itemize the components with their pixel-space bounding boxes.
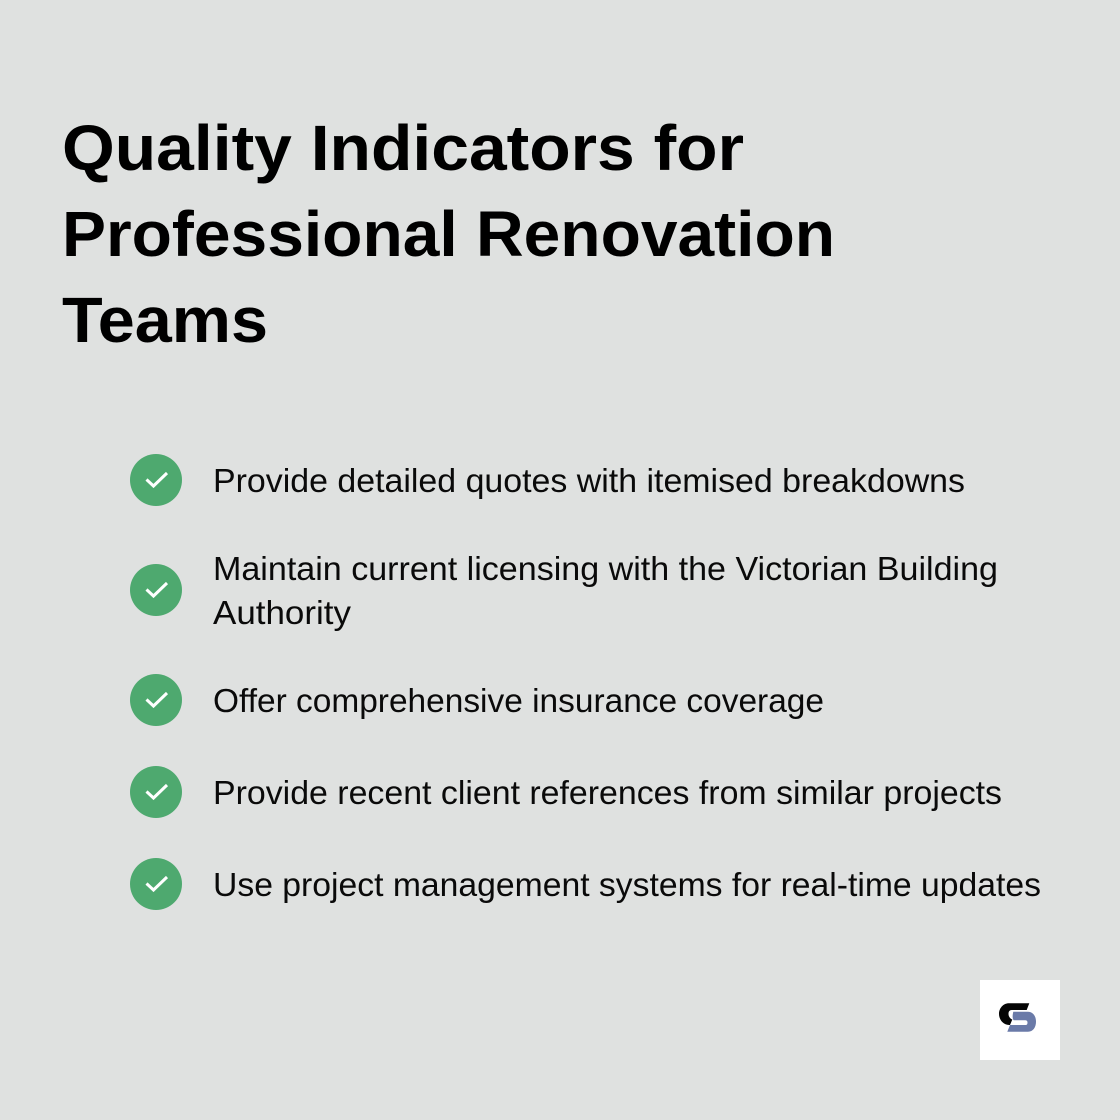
item 2: Maintain current licensing with the Victorian Building (213, 550, 998, 587)
item 2 (130, 550, 998, 631)
item 3: Offer comprehensive insurance coverage (213, 682, 824, 719)
title: Quality Indicators for (62, 112, 744, 184)
title: Professional Renovation (62, 198, 835, 270)
item 1 (130, 454, 965, 506)
checklist (130, 454, 1041, 910)
item 4 (130, 766, 1002, 818)
title (62, 112, 835, 356)
item 1: Provide detailed quotes with itemised breakdowns (213, 462, 965, 499)
item 4: Provide recent client references from similar projects (213, 774, 1002, 811)
item 5: Use project management systems for real-time updates (213, 866, 1041, 903)
logo (980, 980, 1060, 1060)
item 3 (130, 674, 824, 726)
item 5 (130, 858, 1041, 910)
item 2: Authority (213, 594, 352, 631)
title: Teams (62, 284, 268, 356)
